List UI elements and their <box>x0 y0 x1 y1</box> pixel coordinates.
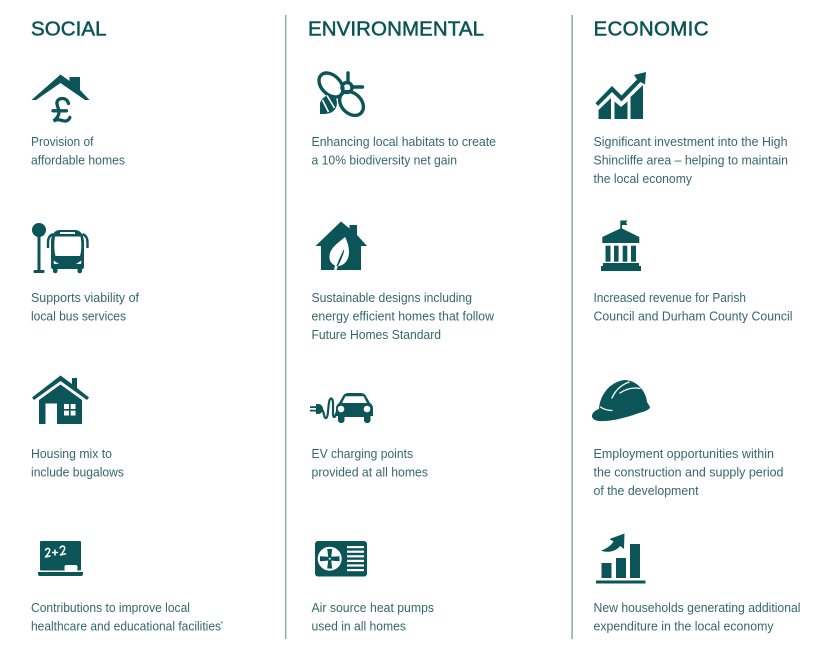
icon: bee <box>314 68 368 120</box>
icon: house with leaf <box>316 222 367 270</box>
text: sustainable designs: Future Homes Standard <box>312 328 441 342</box>
text: revenue: Increased revenue for Parish <box>594 291 746 305</box>
text: investment: Shincliffe area – helping to maintain <box>594 154 788 168</box>
text: ev charging: provided at all homes <box>312 466 428 480</box>
icon: blackboard <box>38 541 83 576</box>
text: revenue: Council and Durham County Council <box>594 310 792 324</box>
icon: house <box>32 376 89 424</box>
text: contributions <box>31 601 224 634</box>
text: heat pumps <box>312 601 434 634</box>
text: provision of affordable homes: affordable homes <box>31 154 125 168</box>
text: supports viability of local bus services <box>31 291 139 324</box>
heading: economic: ECONOMIC <box>594 18 709 40</box>
text: housing mix <box>31 447 124 480</box>
text: provision of affordable homes <box>31 135 125 168</box>
text: employment: of the development <box>594 484 699 498</box>
heading: social: SOCIAL <box>31 18 106 40</box>
text: supports viability of local bus services: local bus services <box>31 310 126 324</box>
text: heat pumps: Air source heat pumps <box>312 601 434 615</box>
text: sustainable designs <box>312 291 495 342</box>
heading: environmental: ENVIRONMENTAL <box>308 18 484 40</box>
text: employment <box>594 447 784 498</box>
icon: air source heat pump <box>315 541 367 576</box>
text: biodiversity: a 10% biodiversity net gain <box>312 154 457 168</box>
text: contributions: healthcare and educational facilities <box>31 620 221 634</box>
text: investment: Significant investment into the High <box>594 135 788 149</box>
icon: bar chart with arrow <box>596 534 646 584</box>
text: ev charging <box>312 447 428 480</box>
text: revenue <box>594 291 792 324</box>
text: biodiversity <box>312 135 496 168</box>
text: investment: the local economy <box>594 172 693 186</box>
icon: rising chart <box>596 72 646 119</box>
text: households: expenditure in the local economy <box>594 620 774 634</box>
text: provision of affordable homes: Provision of <box>31 135 94 149</box>
text: sustainable designs: energy efficient homes that follow <box>312 310 495 324</box>
text: employment: the construction and supply period <box>594 466 784 480</box>
text: biodiversity: Enhancing local habitats to create <box>312 135 496 149</box>
text: supports viability of local bus services: Supports viability of <box>31 291 139 305</box>
icon: house with pound sign <box>32 74 90 121</box>
icon: civic building <box>601 220 641 271</box>
text: households <box>594 601 800 634</box>
icon: hard hat <box>592 380 650 421</box>
text: ev charging: EV charging points <box>312 447 413 461</box>
text: housing mix: Housing mix to <box>31 447 112 461</box>
text: sustainable designs: Sustainable designs including <box>312 291 472 305</box>
text: housing mix: include bugalows <box>31 466 124 480</box>
text: employment: Employment opportunities within <box>594 447 774 461</box>
text: households: New households generating additional <box>594 601 800 615</box>
text: contributions: Contributions to improve local <box>31 601 190 615</box>
icon: bus stop and bus <box>32 223 88 273</box>
text: investment <box>594 135 788 186</box>
text: contributions: * <box>220 621 224 628</box>
text: heat pumps: used in all homes <box>312 620 406 634</box>
icon: electric car charging <box>310 393 373 423</box>
